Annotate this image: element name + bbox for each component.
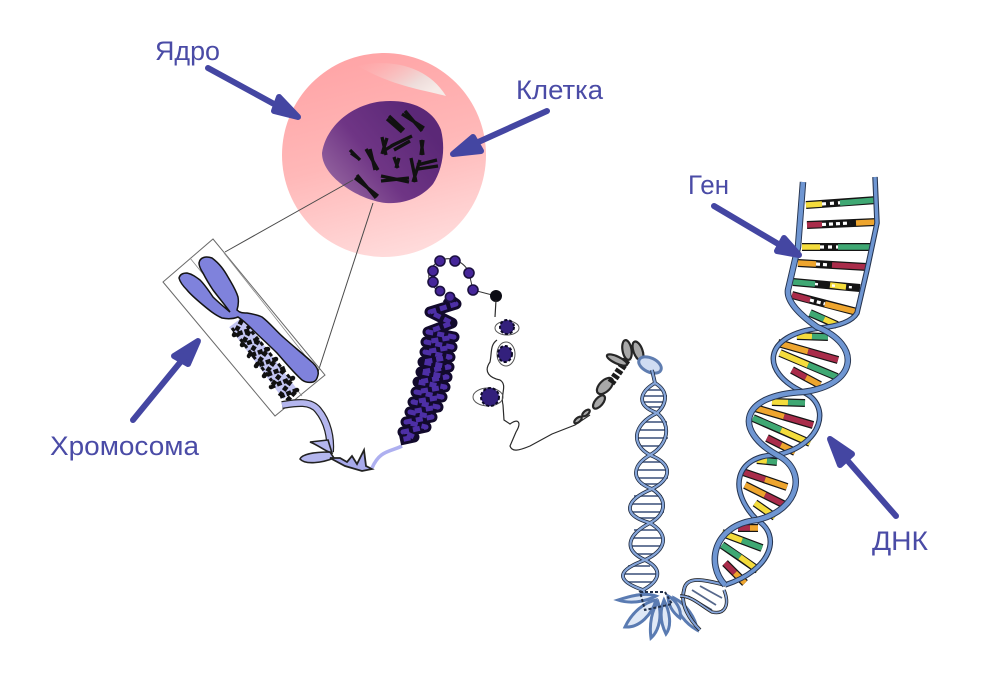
arrow: Хромосома [133,341,198,420]
nucleosomes on thin strand [473,300,590,450]
base pair rungs [722,200,877,583]
bead string [428,256,502,302]
nucleus [322,101,443,203]
cell body [282,53,486,257]
backbone strand front [715,182,848,585]
arrow: Ген [714,206,799,255]
black bead [490,290,502,302]
chromosome with frame [163,239,325,416]
nucleosome 2 [497,342,515,366]
nucleosome 3 [473,388,503,406]
small helix turn [680,580,727,630]
fins [300,440,334,463]
cell highlight [358,63,446,96]
arrow: Клетка [453,111,547,154]
coloured DNA double helix [715,177,877,585]
label: ДНК: ДНК [872,526,928,556]
smooth chromatid [179,257,318,382]
thin DNA helix [623,354,668,600]
ribbon fibre [282,403,402,471]
coiled chromatid [232,320,297,404]
backbone strand back [725,177,877,585]
nucleosome 1 [495,320,519,335]
purple solenoid coil [400,297,456,440]
chromosomes in nucleus [350,111,438,198]
label: Хромосома: Хромосома [50,431,200,461]
inner frame lines [190,253,315,396]
zoom guide lines [225,180,373,372]
frame [163,239,325,416]
label: Ген: Ген [688,170,729,200]
DNA fan fold [618,592,697,638]
label: Клетка: Клетка [516,75,604,105]
arrow: Ядро [208,68,298,117]
cell [282,53,486,257]
grey DNA transition [573,339,646,425]
arrow: ДНК [830,439,896,516]
label: Ядро: Ядро [155,36,220,66]
